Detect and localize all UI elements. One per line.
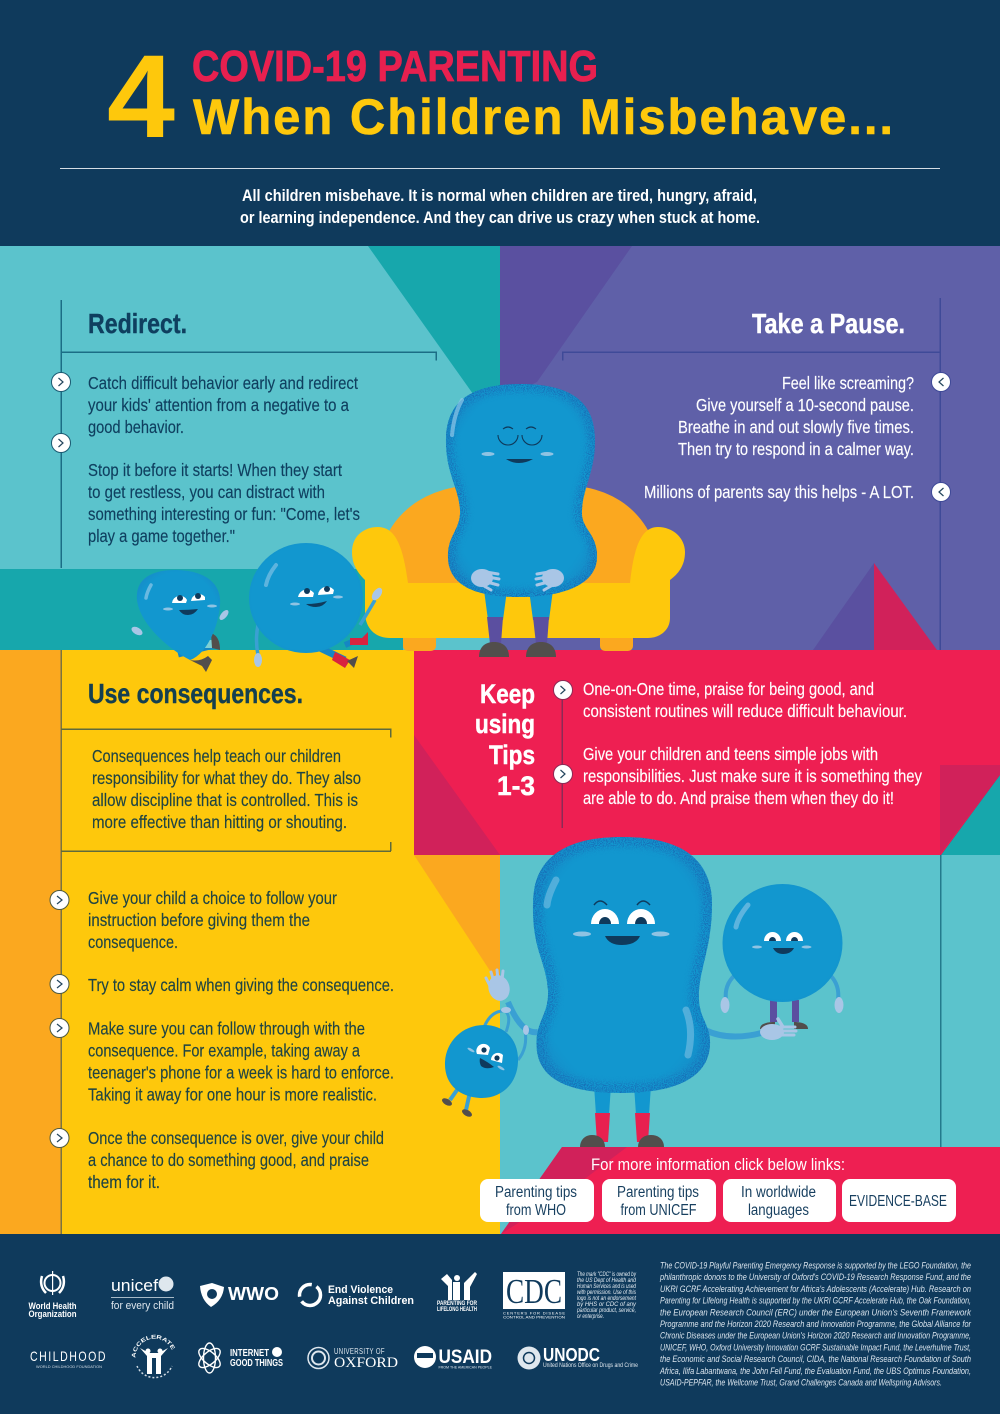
face bbox=[163, 593, 217, 615]
bullet icons bbox=[52, 372, 70, 452]
logo: USAID bbox=[414, 1346, 492, 1370]
logo: Accelerate: ACCELERATE bbox=[132, 1334, 176, 1358]
logo: World Health Organization: World Health bbox=[28, 1301, 76, 1311]
consequences intro: more effective than hitting or shouting. bbox=[92, 812, 347, 832]
redirect text: your kids' attention from a negative to a bbox=[88, 395, 349, 415]
consequences list: consequence. For example, taking away a bbox=[88, 1040, 360, 1060]
tips text: responsibilities. Just make sure it is something they bbox=[583, 766, 922, 786]
consequences intro bbox=[92, 746, 361, 832]
consequences list: Taking it away for one hour is more realistic. bbox=[88, 1084, 377, 1104]
heading: keep using tips bbox=[475, 679, 535, 801]
illustration: child sitting left bbox=[130, 570, 230, 672]
parent hand bbox=[760, 1019, 796, 1040]
button: worldwide languages: languages bbox=[748, 1202, 809, 1219]
page background panels bbox=[0, 246, 1000, 1234]
logo: Parenting for Lifelong Health bbox=[437, 1272, 478, 1313]
heading: keep using tips: Keep bbox=[480, 679, 535, 709]
face bbox=[482, 427, 554, 463]
links heading: For more information click below links: bbox=[591, 1156, 845, 1174]
panel: keep using tips bbox=[414, 650, 1000, 855]
button: parenting tips from WHO: Parenting tips bbox=[495, 1184, 577, 1201]
intro text: or learning independence. And they can drive us crazy when stuck at home. bbox=[240, 209, 760, 227]
redirect text: good behavior. bbox=[88, 417, 184, 437]
heading: take a pause: Take a Pause. bbox=[752, 308, 905, 339]
tips text: are able to do. And praise them when they do it! bbox=[583, 788, 894, 808]
CDC disclaimer: or enterprise. bbox=[577, 1314, 604, 1320]
logo: CDC: CENTERS FOR DISEASE bbox=[503, 1310, 565, 1316]
logo: unicef: unicef bbox=[111, 1276, 158, 1295]
pause text bbox=[644, 373, 914, 502]
CDC disclaimer: Human Services and is used bbox=[577, 1284, 637, 1290]
tips text: One-on-One time, praise for being good, and bbox=[583, 679, 874, 699]
bullet icons bbox=[932, 372, 950, 502]
hands bbox=[471, 569, 564, 590]
logo: UNODC bbox=[518, 1345, 639, 1370]
logo: End Violence Against Children: Against Children bbox=[328, 1295, 414, 1307]
button: parenting tips from UNICEF: from UNICEF bbox=[620, 1202, 696, 1219]
bullet icons bbox=[50, 890, 69, 1148]
logo: UNODC: UNODC bbox=[543, 1345, 600, 1365]
raised arm and hand bbox=[485, 970, 538, 1035]
logo: Childhood: CHILDHOOD bbox=[30, 1348, 107, 1364]
button: evidence-base: EVIDENCE-BASE bbox=[849, 1193, 947, 1210]
logo: unicef bbox=[111, 1276, 174, 1312]
logo: WWO: WWO bbox=[228, 1284, 279, 1304]
heading: keep using tips: Tips bbox=[489, 740, 535, 770]
pause text: Give yourself a 10-second pause. bbox=[696, 395, 914, 415]
redirect text: play a game together." bbox=[88, 526, 235, 546]
tips text bbox=[583, 679, 922, 808]
logo: Childhood bbox=[30, 1348, 107, 1369]
logo: World Health Organization: Organization bbox=[28, 1309, 76, 1319]
logo: Internet of Good Things bbox=[196, 1343, 283, 1373]
face bbox=[467, 1044, 505, 1071]
logo: University of Oxford bbox=[308, 1347, 398, 1371]
CDC disclaimer: logo is not an endorsement bbox=[577, 1296, 636, 1302]
consequences list: Give your child a choice to follow your bbox=[88, 888, 337, 908]
logo: CDC: CDC bbox=[506, 1272, 562, 1311]
CDC disclaimer: particular product, service, bbox=[576, 1308, 636, 1314]
heading: redirect: Redirect. bbox=[88, 308, 187, 339]
header band bbox=[0, 0, 1000, 246]
face bbox=[752, 932, 812, 954]
button: parenting tips from UNICEF: Parenting tips bbox=[617, 1184, 699, 1201]
panel: redirect bbox=[52, 300, 437, 568]
illustration: child sitting right bbox=[249, 543, 384, 668]
consequences list: Once the consequence is over, give your child bbox=[88, 1128, 384, 1148]
logo: Childhood: WORLD CHILDHOOD FOUNDATION bbox=[36, 1365, 103, 1369]
logo: CDC bbox=[503, 1272, 565, 1320]
pause text: Breathe in and out slowly five times. bbox=[678, 417, 914, 437]
logo: Internet of Good Things: GOOD THINGS bbox=[230, 1357, 283, 1369]
logo: CDC: CONTROL AND PREVENTION bbox=[503, 1314, 565, 1320]
consequences list: teenager's phone for a week is hard to enforce. bbox=[88, 1062, 394, 1082]
logo: unicef: for every child bbox=[111, 1300, 174, 1312]
illustration: parent on couch bbox=[446, 384, 597, 657]
redirect text: something interesting or fun: "Come, let's bbox=[88, 504, 360, 524]
logo: University of Oxford: UNIVERSITY OF bbox=[334, 1347, 385, 1356]
consequences intro: responsibility for what they do. They also bbox=[92, 768, 361, 788]
consequences list: instruction before giving them the bbox=[88, 910, 310, 930]
intro text bbox=[240, 187, 760, 227]
heading: keep using tips: using bbox=[475, 709, 535, 739]
illustration: small child lifted bbox=[441, 1011, 526, 1118]
logo: University of Oxford: OXFORD bbox=[334, 1355, 398, 1371]
illustration: couch bbox=[352, 485, 685, 651]
pause text: Feel like screaming? bbox=[782, 373, 914, 393]
pause text: Millions of parents say this helps - A LOT. bbox=[644, 482, 914, 502]
logo: USAID: USAID bbox=[438, 1347, 492, 1368]
logo: USAID: FROM THE AMERICAN PEOPLE bbox=[438, 1364, 492, 1370]
consequences list: them for it. bbox=[88, 1172, 160, 1192]
consequences list: a chance to do something good, and praise bbox=[88, 1150, 369, 1170]
redirect text: Catch difficult behavior early and redirect bbox=[88, 373, 358, 393]
logo: End Violence Against Children: End Violence bbox=[328, 1284, 393, 1296]
logo: UNODC: United Nations Office on Drugs and Crime bbox=[543, 1363, 639, 1369]
consequences list: consequence. bbox=[88, 932, 178, 952]
CDC disclaimer bbox=[576, 1272, 637, 1320]
logo: End Violence Against Children bbox=[300, 1284, 414, 1307]
redirect text: to get restless, you can distract with bbox=[88, 482, 325, 502]
panel: take a pause bbox=[562, 298, 950, 650]
footer bbox=[28, 1260, 972, 1388]
button: parenting tips from WHO: from WHO bbox=[506, 1202, 566, 1219]
face bbox=[290, 586, 343, 607]
button: evidence-base bbox=[842, 1179, 956, 1222]
CDC disclaimer: with permission. Use of this bbox=[577, 1290, 636, 1296]
heading: use consequences: Use consequences. bbox=[88, 678, 303, 709]
intro text: All children misbehave. It is normal when children are tired, hungry, afraid, bbox=[242, 187, 757, 205]
illustration: child standing on hand bbox=[720, 884, 844, 1040]
logo: Internet of Good Things: INTERNET bbox=[230, 1347, 269, 1359]
button: parenting tips from UNICEF bbox=[602, 1179, 716, 1222]
logo: Parenting for Lifelong Health: LIFELONG HEALTH bbox=[437, 1307, 477, 1313]
logo: Accelerate bbox=[132, 1334, 176, 1378]
panel: use consequences bbox=[50, 650, 394, 1234]
face bbox=[573, 901, 670, 945]
CDC disclaimer: by HHS or CDC of any bbox=[577, 1302, 637, 1308]
consequences list: Make sure you can follow through with the bbox=[88, 1018, 365, 1038]
button: worldwide languages: In worldwide bbox=[741, 1184, 816, 1201]
redirect text: Stop it before it starts! When they start bbox=[88, 460, 342, 480]
logo: World Health Organization bbox=[28, 1271, 76, 1319]
CDC disclaimer: the US Dept of Health and bbox=[577, 1278, 637, 1284]
pause text: Then try to respond in a calmer way. bbox=[678, 439, 914, 459]
button: worldwide languages bbox=[723, 1179, 836, 1222]
consequences list: Try to stay calm when giving the consequence. bbox=[88, 975, 394, 995]
tips text: consistent routines will reduce difficult behaviour. bbox=[583, 701, 907, 721]
title line 2: When Children Misbehave... bbox=[193, 89, 895, 145]
bullet icons bbox=[554, 680, 572, 784]
tips text: Give your children and teens simple jobs with bbox=[583, 744, 878, 764]
illustration: parent with two children bbox=[485, 837, 765, 1147]
arm holding child bbox=[705, 1030, 765, 1037]
title line 1: COVID-19 PARENTING bbox=[192, 42, 598, 91]
links banner bbox=[480, 1147, 1000, 1234]
consequences intro: allow discipline that is controlled. This is bbox=[92, 790, 358, 810]
redirect text bbox=[88, 373, 360, 546]
funding statement bbox=[659, 1260, 972, 1388]
title number: 4 bbox=[107, 31, 175, 163]
CDC disclaimer: The mark "CDC" is owned by bbox=[577, 1272, 637, 1278]
logo: WWO bbox=[200, 1283, 279, 1307]
consequences intro: Consequences help teach our children bbox=[92, 746, 341, 766]
heading: keep using tips: 1-3 bbox=[497, 771, 535, 801]
logo: Parenting for Lifelong Health: PARENTING FOR bbox=[437, 1301, 478, 1307]
button: parenting tips from WHO bbox=[480, 1179, 594, 1222]
consequences list bbox=[88, 888, 394, 1192]
